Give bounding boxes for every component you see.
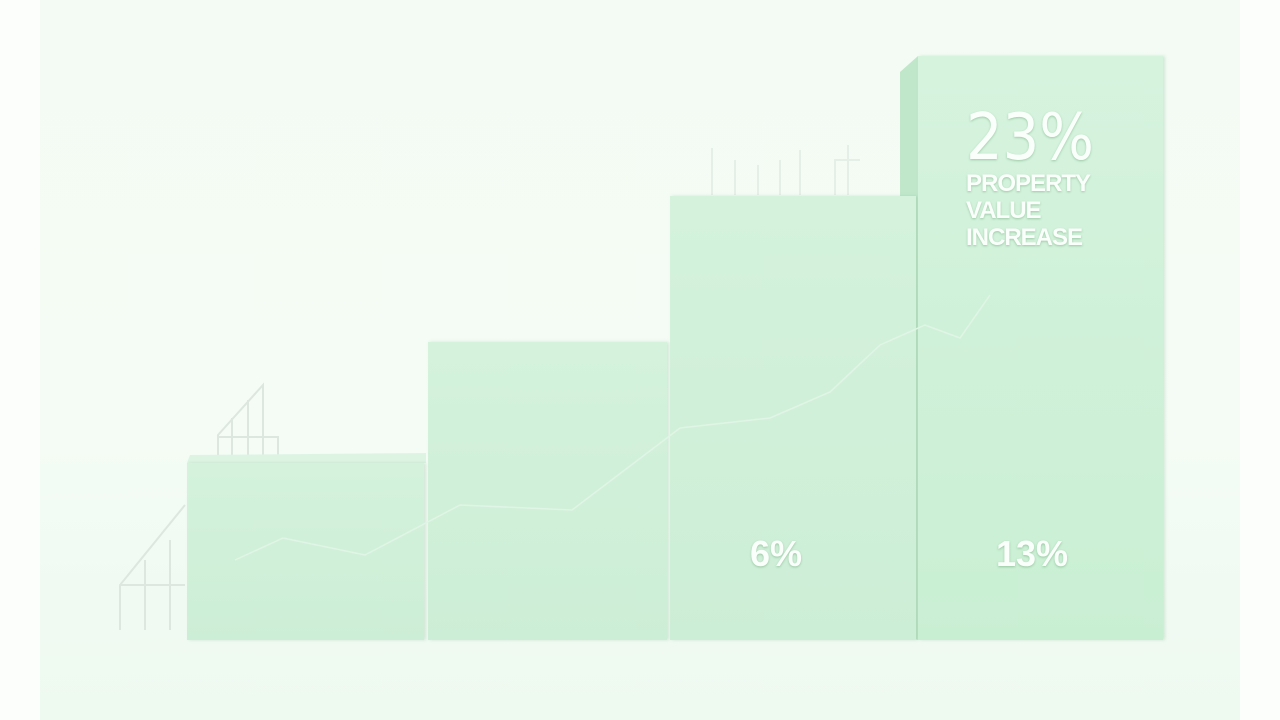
callout: 23% property value increase [966, 101, 1094, 251]
caption: PROPERTY [966, 170, 1090, 197]
bar 4 [918, 56, 1163, 640]
bar 3 [670, 196, 916, 640]
big number: 23% [966, 101, 1094, 175]
bar 4 side face [900, 56, 918, 640]
caption [966, 170, 1091, 251]
caption: INCREASE [966, 224, 1082, 251]
bar 2 [428, 342, 667, 640]
icon: railing behind bar 3 [712, 145, 860, 195]
label: 6%: 6% [750, 533, 802, 574]
bar 1 top face [187, 453, 426, 463]
caption: VALUE [966, 197, 1041, 224]
icon: staircase railing left [120, 385, 278, 630]
bar 1 [187, 463, 424, 640]
label: 13%: 13% [996, 533, 1068, 574]
